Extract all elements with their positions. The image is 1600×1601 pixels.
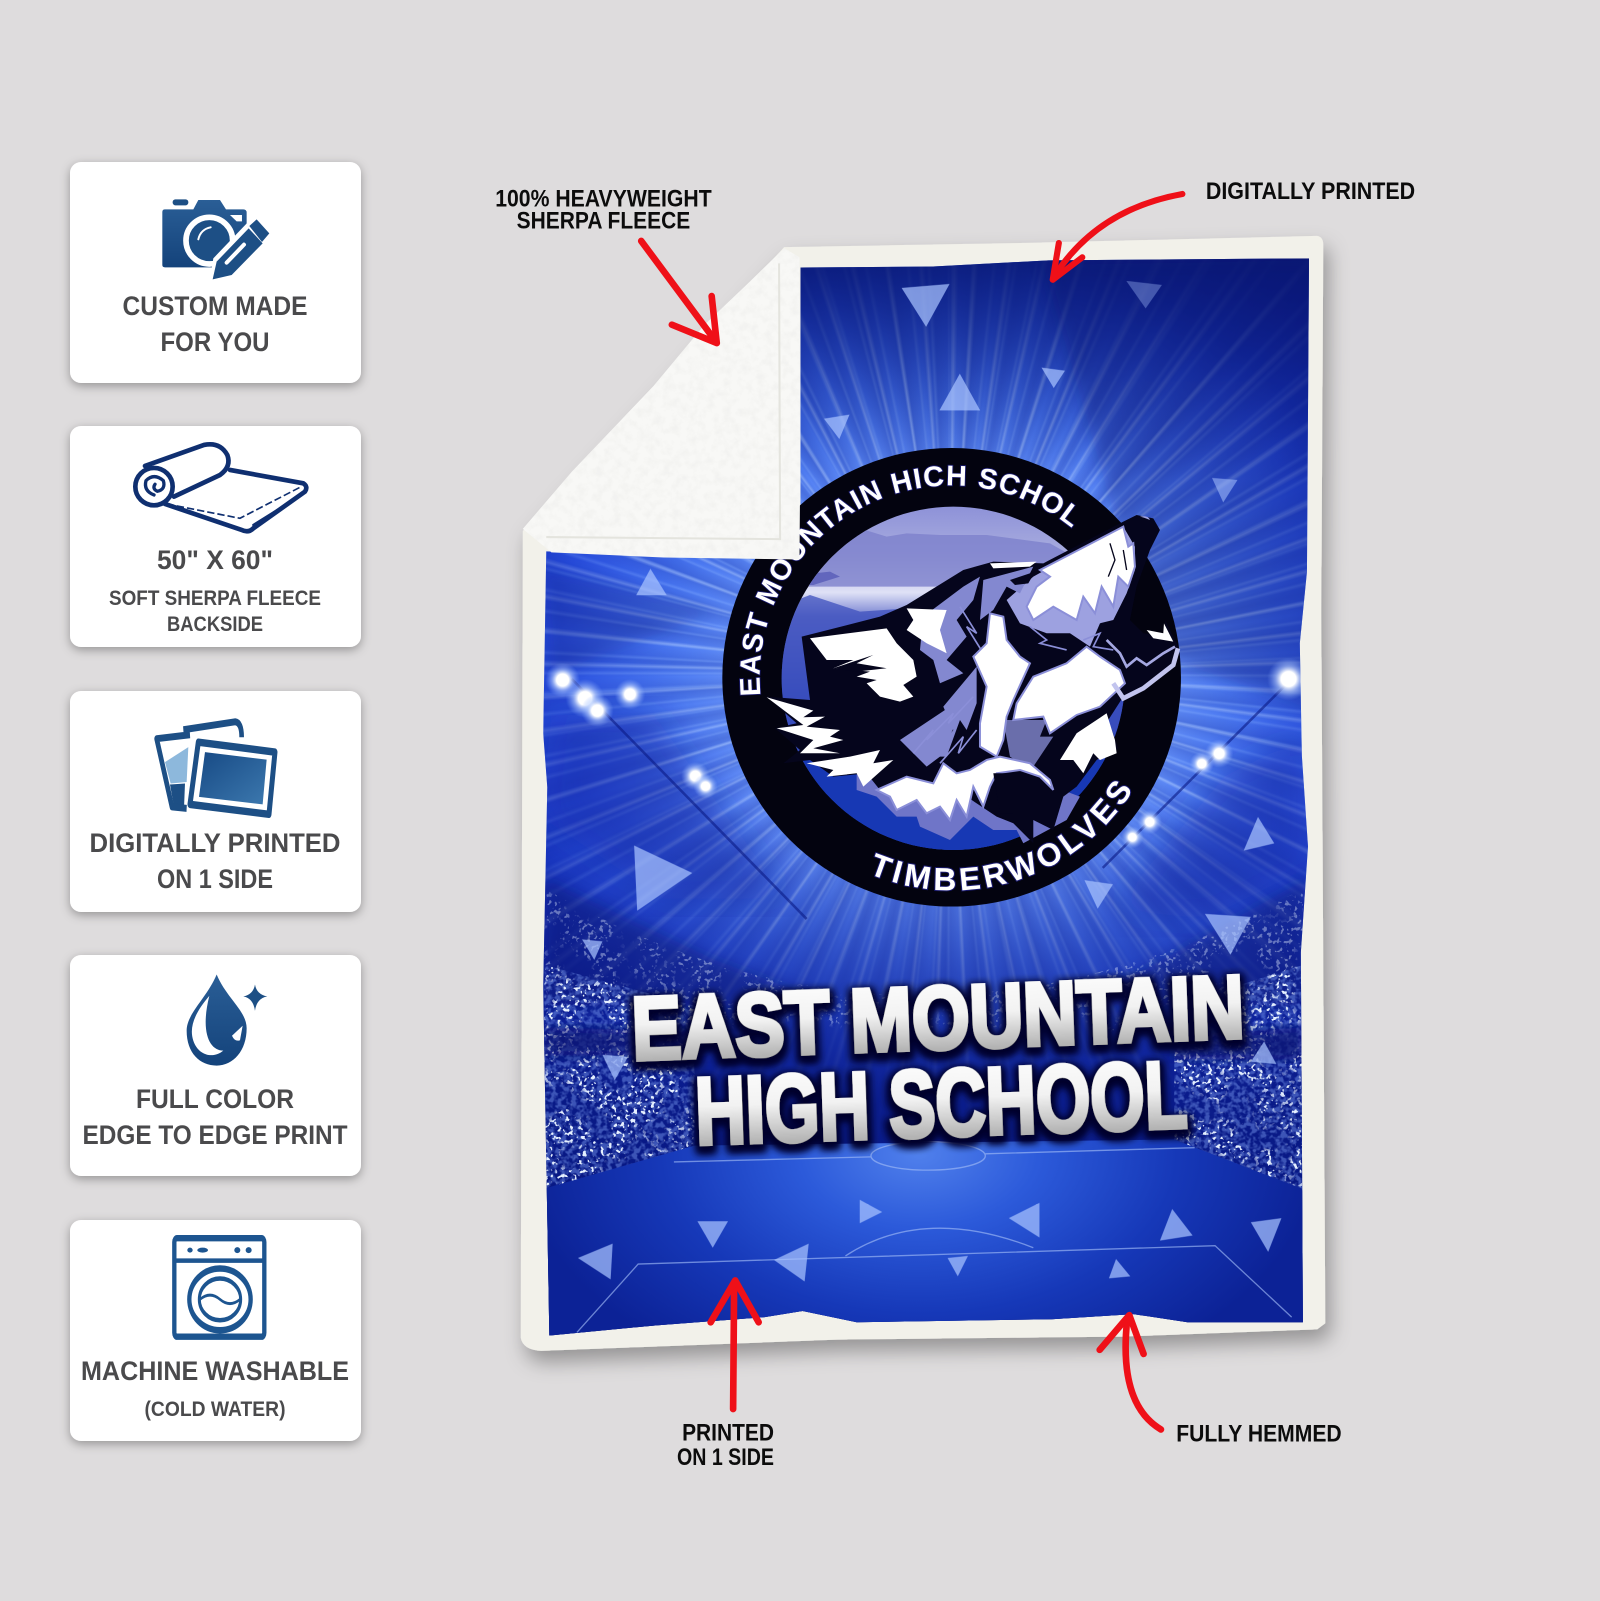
stadium lights <box>545 658 1310 849</box>
snout fur <box>1027 527 1135 620</box>
panel: custom made card: FOR YOU <box>160 327 270 357</box>
panel: size card: BACKSIDE <box>167 613 263 636</box>
panel: machine washable card: (COLD WATER) <box>144 1398 286 1421</box>
blanket product photo <box>496 182 1414 1465</box>
arrow: to print top <box>1053 194 1182 280</box>
annotation: digitally printed: DIGITALLY PRINTED <box>1206 178 1415 205</box>
icon: washing machine <box>174 1238 264 1337</box>
arrow: to print bottom <box>711 1280 759 1409</box>
panel: custom made card <box>70 162 361 383</box>
panel: digitally printed card <box>70 691 361 912</box>
floating triangles <box>578 281 1281 1281</box>
icon: printed sheets <box>157 722 275 814</box>
ring text: EAST MOUNTAIN HICH SCHOL <box>739 464 1076 696</box>
panel: digitally printed card: DIGITALLY PRINTED <box>90 828 340 858</box>
icon: water drop with sparkle <box>187 975 267 1066</box>
heading: East Mountain High School <box>630 957 1246 1166</box>
blanket print area <box>543 258 1309 1336</box>
panel: size card <box>70 426 361 647</box>
panel: machine washable card <box>70 1220 361 1441</box>
logo: Timberwolves badge <box>722 448 1181 906</box>
annotation: heavyweight sherpa fleece: SHERPA FLEECE <box>517 208 690 235</box>
field <box>541 1140 1307 1338</box>
panel: feature cards column <box>70 162 361 1441</box>
panel: digitally printed card: ON 1 SIDE <box>157 864 273 894</box>
annotation: heavyweight sherpa fleece <box>495 185 712 235</box>
heading: East Mountain High School: EAST MOUNTAIN <box>630 957 1246 1080</box>
blanket hem base <box>521 236 1325 1351</box>
heading: East Mountain High School: HIGH SCHOOL <box>693 1041 1189 1166</box>
annotation: fully hemmed: FULLY HEMMED <box>1176 1421 1342 1448</box>
annotation: printed on 1 side <box>677 1420 774 1471</box>
annotation: printed on 1 side: ON 1 SIDE <box>677 1444 774 1471</box>
panel: size card: 50" X 60" <box>157 545 273 575</box>
arrow: to fleece <box>641 241 717 343</box>
panel: machine washable card: MACHINE WASHABLE <box>81 1356 349 1386</box>
annotation: heavyweight sherpa fleece: 100% HEAVYWEIGHT <box>495 185 712 212</box>
panel: size card: SOFT SHERPA FLEECE <box>109 587 321 610</box>
panel: full color card: EDGE TO EDGE PRINT <box>82 1120 348 1150</box>
wolf illustration <box>767 515 1178 843</box>
icon: rolled blanket <box>135 444 306 531</box>
panel: custom made card: CUSTOM MADE <box>122 291 308 321</box>
arrow: to hem <box>1100 1315 1161 1429</box>
icon: camera and pencil <box>162 199 277 283</box>
annotation: printed on 1 side: PRINTED <box>682 1420 774 1447</box>
panel: full color card <box>70 955 361 1176</box>
logo: Timberwolves badge: TIMBERWOLVES <box>874 780 1132 892</box>
panel: full color card: FULL COLOR <box>136 1084 294 1114</box>
sherpa fleece fold <box>521 245 807 562</box>
